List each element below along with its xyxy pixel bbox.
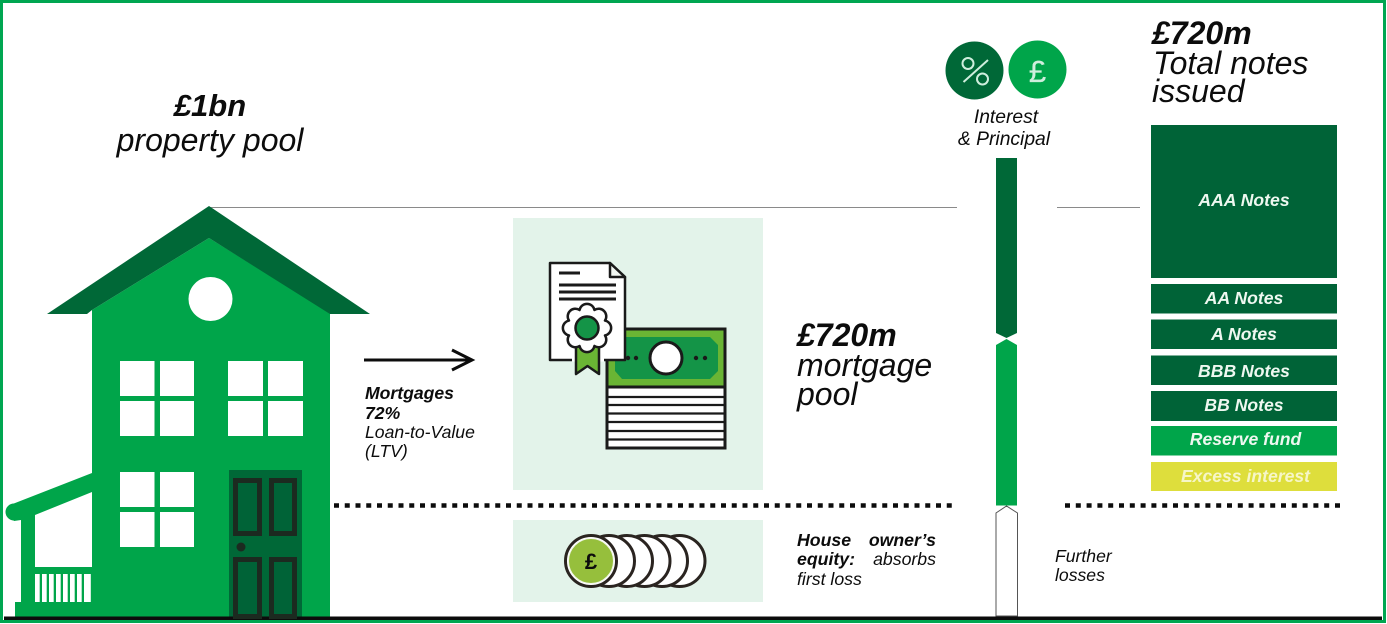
icon: certificate [550,263,625,374]
excess interest: Excess interest [1181,466,1311,486]
arrow: mortgages [364,350,472,370]
excess interest [1151,462,1337,491]
text: mortgages LTV: 72% [365,403,401,423]
AA notes: AA Notes [1204,288,1283,308]
upper left window [120,361,194,436]
text: house owner's equity [797,530,936,589]
panel: mortgage pool icon [513,218,763,490]
heading: total notes issued: Total notes [1153,45,1308,81]
heading: mortgage pool: £720m [796,317,897,353]
icon: banknote stack [607,329,725,448]
house roof [47,206,370,314]
reserve fund: Reserve fund [1190,429,1302,449]
text: house owner's equity: equity: [797,549,855,569]
door [229,470,302,616]
notes stack [1151,125,1337,491]
heading: total notes issued: issued [1152,73,1246,109]
white segment [996,506,1018,616]
AAA notes: AAA Notes [1197,190,1290,210]
A notes [1151,320,1337,349]
heading: total notes issued [1151,15,1308,109]
BB notes [1151,391,1337,421]
house wall [92,238,330,616]
heading: property pool: property pool [116,122,304,158]
text: mortgages LTV [365,383,475,461]
attic window [188,277,232,321]
A notes: A Notes [1210,324,1277,344]
text: further losses: Further [1055,546,1113,566]
icon: coins [566,536,705,586]
text: interest and principal [958,107,1051,150]
upper right window [228,361,303,436]
text: further losses [1055,546,1113,585]
heading: mortgage pool: pool [796,376,858,412]
reserve fund [1151,426,1337,456]
heading: total notes issued: £720m [1151,15,1252,51]
porch [6,473,92,616]
text: further losses: losses [1055,565,1105,585]
AA notes [1151,284,1337,314]
heading: property pool [116,88,304,158]
BB notes: BB Notes [1204,395,1284,415]
text: mortgages LTV: Mortgages [365,383,454,403]
text: mortgages LTV: (LTV) [365,441,408,461]
BBB notes: BBB Notes [1198,361,1290,381]
text: house owner's equity: owner’s [869,530,936,550]
lower window [120,472,194,547]
text: house owner's equity: first loss [797,569,862,589]
BBB notes [1151,356,1337,385]
heading: property pool: £1bn [173,88,246,123]
AAA notes [1151,125,1337,278]
icon: pound [1008,40,1066,98]
text: interest and principal: Interest [974,107,1040,128]
heading: mortgage pool [796,317,932,412]
panel: equity icon [513,520,763,602]
green segment [996,339,1017,506]
icon: percent [946,42,1004,100]
dark segment [996,158,1017,338]
icon: pound: £ [1029,54,1046,89]
icon: house [6,206,370,616]
waterfall column [996,158,1018,616]
text: interest and principal: & Principal [958,129,1051,150]
text: house owner's equity: House [797,530,851,550]
heading: mortgage pool: mortgage [797,347,932,383]
text: mortgages LTV: Loan-to-Value [365,422,475,442]
icon: coins: £ [585,549,598,574]
text: house owner's equity: absorbs [873,549,936,569]
